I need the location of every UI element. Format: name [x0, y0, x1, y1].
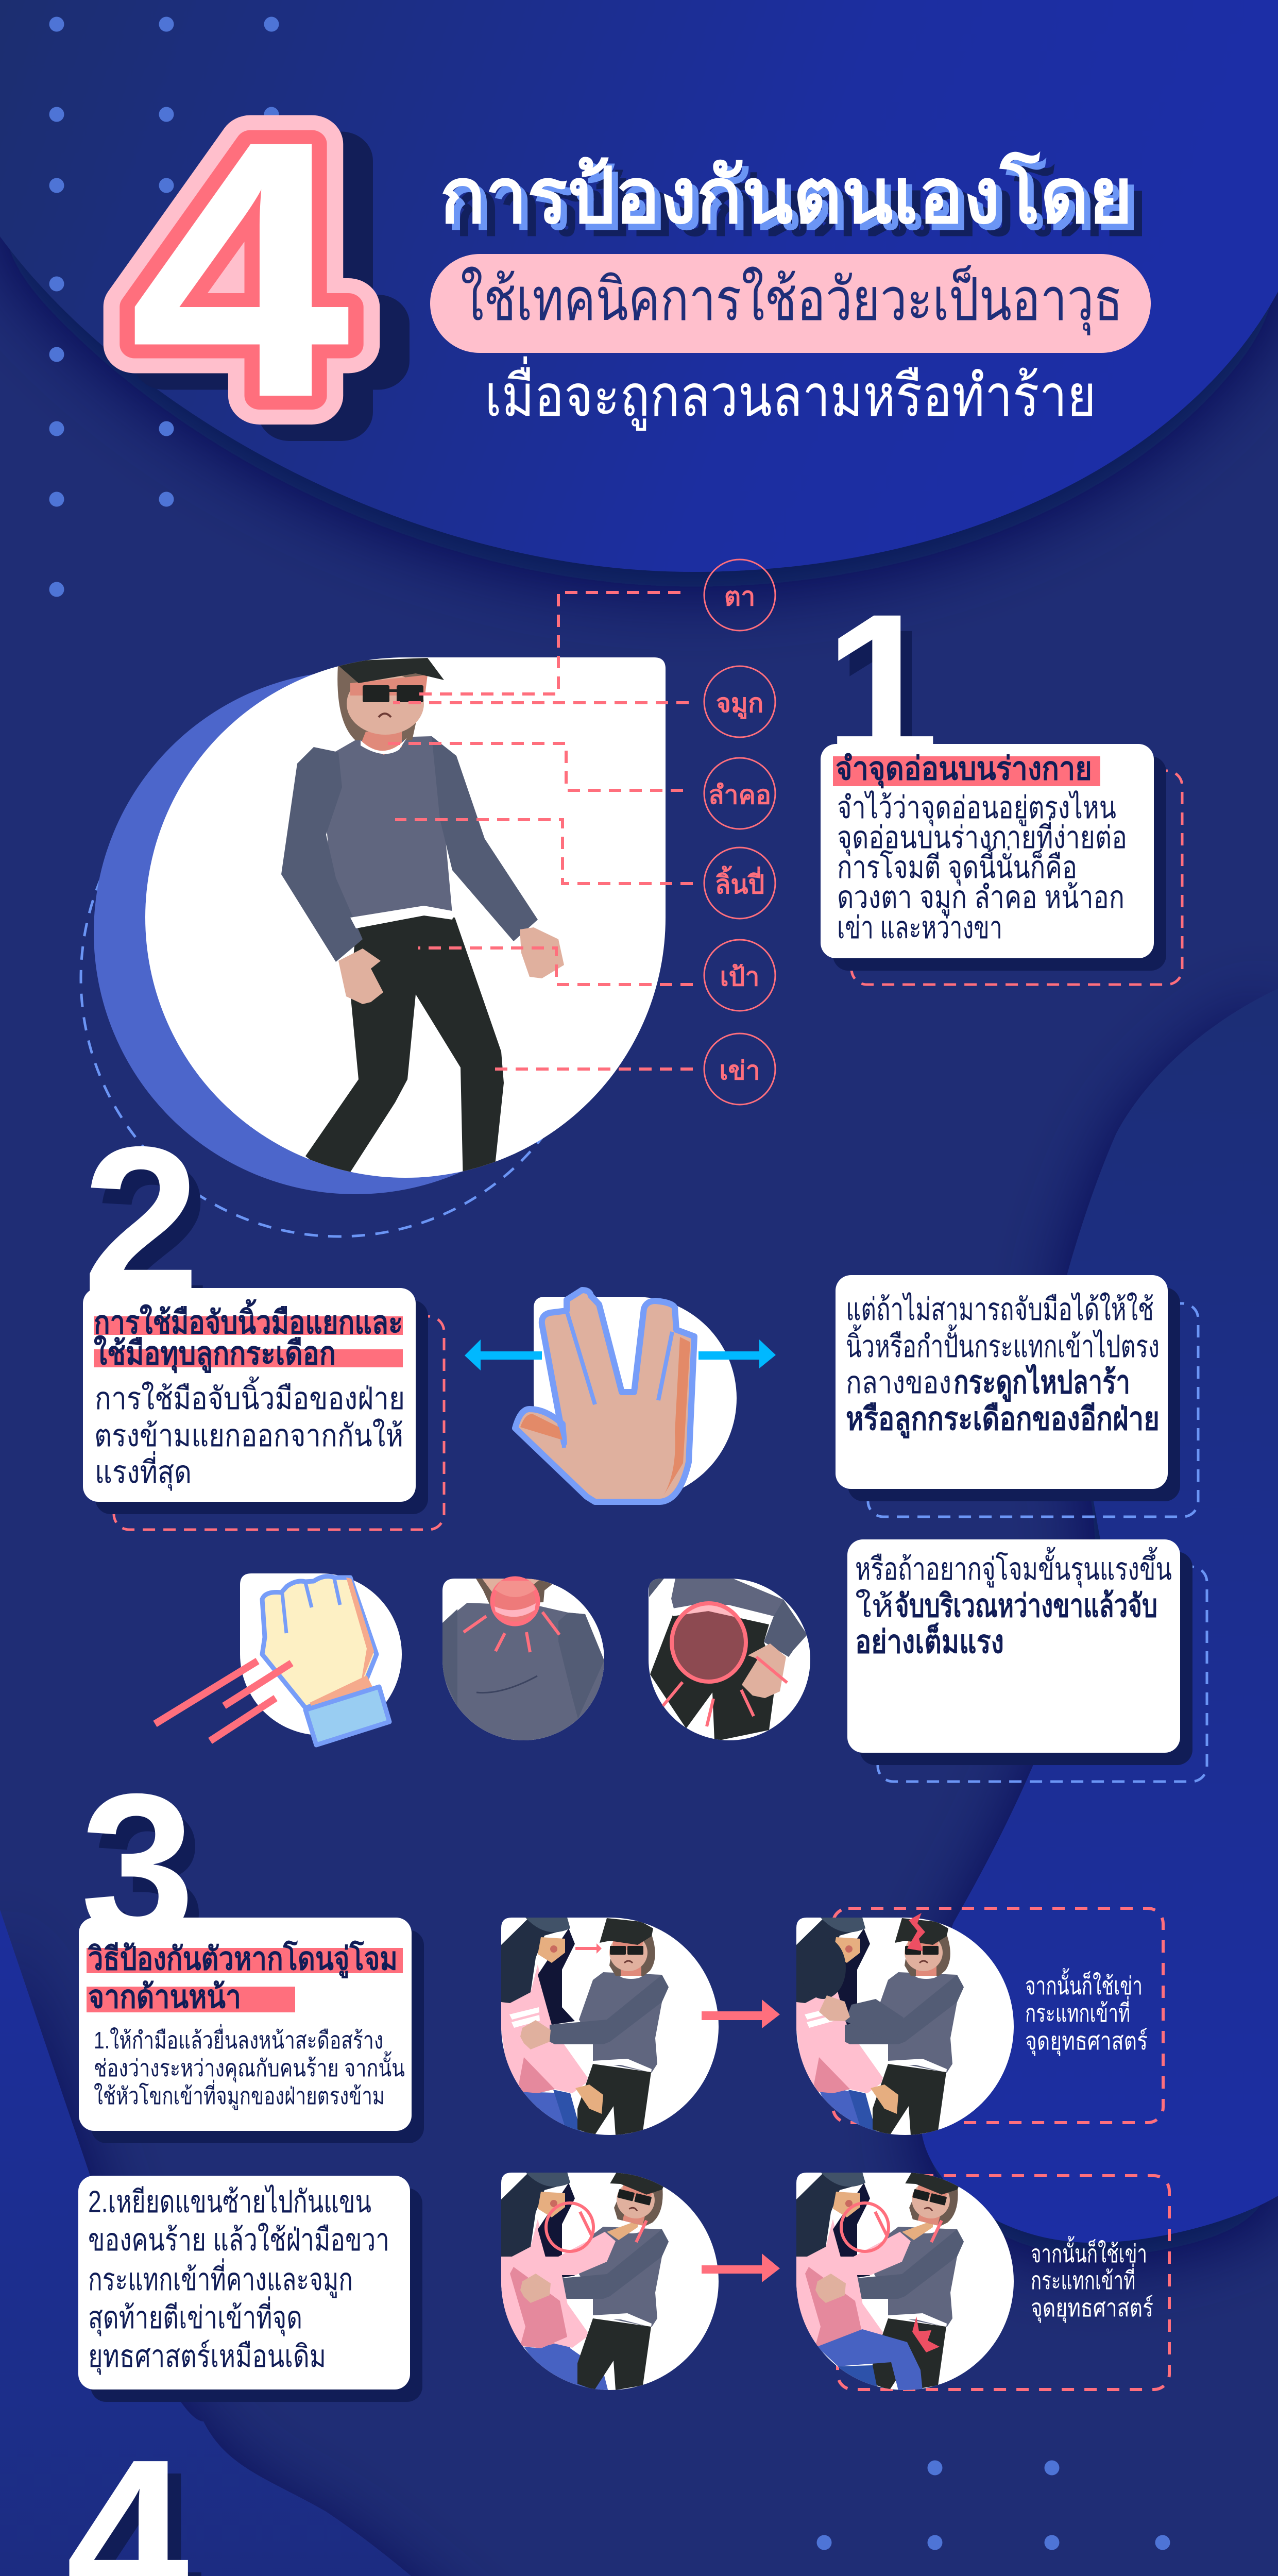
panel: step 3 A: 1.ให้กำมือแล้วยื่นลงหน้าสะดือสร้าง — [94, 2024, 383, 2054]
panel: step 3 A: วิธีป้องกันตัวหากโดนจู่โจม — [88, 1940, 398, 1978]
panel: step 3 A: ใช้หัวโขกเข้าที่จมูกของฝ่ายตรงข้าม — [94, 2079, 385, 2110]
body part labels: จมูก — [716, 689, 763, 719]
numeral 2: 2 — [94, 1118, 211, 1354]
numeral 3: 3 — [92, 1766, 206, 1996]
arrow: B1 to B2 — [702, 2253, 780, 2282]
panel: step 2 right top: กลางของ — [846, 1365, 951, 1400]
body part labels: ลิ้นปี่ — [715, 866, 764, 899]
caption: B2 — [1031, 2236, 1153, 2323]
title line 1: การป้องกันตนเองโดย — [454, 163, 1147, 251]
panel: step 1: การโจมตี จุดนี้นั่นก็คือ — [837, 845, 1077, 886]
scene: B2 — [796, 2159, 1014, 2391]
frame: A2 — [833, 1908, 1163, 2123]
section 1 figure — [81, 657, 666, 1236]
numeral 1: 1 — [836, 586, 950, 817]
panel: step 1: จำจุดอ่อนบนร่างกาย — [836, 751, 1092, 788]
dot pattern bottom right — [712, 2461, 1274, 2576]
panel: step 3 A: ช่องว่างระหว่างคุณกับคนร้าย จากนั้น — [94, 2051, 405, 2083]
arrow: A1 to A2 — [702, 1999, 780, 2028]
title line 3: เมื่อจะถูกลวนลามหรือทำร้าย — [485, 356, 1096, 431]
caption: B2: กระแทกเข้าที่ — [1031, 2263, 1135, 2295]
panel: step 2 right bottom: ให้ — [855, 1589, 894, 1623]
right background blob — [921, 989, 1278, 2243]
panel: step 1 — [821, 744, 1182, 985]
panel: step 1: จำไว้ว่าจุดอ่อนอยู่ตรงไหน — [837, 790, 1116, 826]
left background blob — [0, 1910, 642, 2576]
body part labels: เข่า — [719, 1056, 760, 1085]
numeral 1: 1 — [824, 571, 939, 801]
panel: step 3 B — [78, 2176, 422, 2402]
icon: punching fist — [155, 1573, 402, 1745]
panel: step 2 right top — [836, 1275, 1198, 1517]
panel: step 2 right top: นิ้วหรือกำปั้นกระแทกเข้าไปตรง — [846, 1324, 1160, 1364]
header dome — [0, 0, 1278, 572]
panel: step 3 B: สุดท้ายตีเข่าเข้าที่จุด — [88, 2296, 302, 2336]
scene: A1 — [501, 1918, 719, 2138]
panel: step 3 B: กระแทกเข้าที่คางและจมูก — [88, 2258, 353, 2298]
panel: step 2 right top: กระดูกไหปลาร้า — [953, 1364, 1130, 1402]
panel: step 2 right bottom: อย่างเต็มแรง — [855, 1622, 1004, 1660]
icon: spread fingers hand — [515, 1290, 737, 1502]
panel: step 2 left — [83, 1288, 444, 1530]
body part labels: ตา — [724, 582, 755, 611]
callout leader lines — [387, 592, 693, 1069]
illustration: throat strike — [442, 1579, 604, 1752]
panel: step 3 A — [79, 1918, 424, 2143]
panel: step 1: เข่า และหว่างขา — [837, 910, 1002, 945]
scene: B1 — [501, 2159, 719, 2396]
panel: step 2 left: ตรงข้ามแยกออกจากกันให้ — [94, 1418, 403, 1453]
panel: step 2 left: การใช้มือจับนิ้วมือของฝ่าย — [95, 1376, 405, 1416]
body part labels — [704, 560, 775, 1105]
panel: step 2 left: แรงที่สุด — [95, 1451, 192, 1491]
numeral 3: 3 — [80, 1751, 195, 1981]
title pill — [430, 254, 1151, 353]
caption: A2: กระแทกเข้าที่ — [1025, 1996, 1130, 2027]
big number 4 sticker: 4 — [129, 65, 353, 473]
caption: B2: จุดยุทธศาสตร์ — [1031, 2295, 1153, 2323]
panel: step 2 right top: แต่ถ้าไม่สามารถจับมือได้ให้ใช้ — [846, 1292, 1154, 1327]
big number 4 sticker: 4 — [159, 81, 383, 490]
big number 4 sticker: 4 — [129, 65, 353, 473]
arrow: right blue — [698, 1340, 776, 1368]
panel: step 3 B: 2.เหยียดแขนซ้ายไปกันแขน — [88, 2184, 371, 2219]
title line 1: การป้องกันตนเองโดย — [440, 151, 1133, 239]
title pill: ใช้เทคนิคการใช้อวัยวะเป็นอาวุธ — [461, 265, 1123, 335]
illustration: groin strike — [649, 1579, 810, 1741]
panel: step 1: จุดอ่อนบนร่างกายที่ง่ายต่อ — [837, 816, 1127, 856]
panel: step 2 right top: หรือลูกกระเดือกของอีกฝ่าย — [846, 1401, 1160, 1438]
panel: step 3 B: ยุทธศาสตร์เหมือนเดิม — [88, 2339, 326, 2375]
panel: step 2 left: ใช้มือทุบลูกกระเดือก — [94, 1335, 336, 1373]
caption: B2: จากนั้นก็ใช้เข่า — [1031, 2236, 1147, 2268]
scene: A2 — [796, 1913, 1014, 2138]
dot pattern top left — [49, 16, 279, 597]
caption: A2: จุดยุทธศาสตร์ — [1025, 2028, 1148, 2056]
caption: A2 — [1025, 1968, 1148, 2056]
frame: B2 — [838, 2176, 1169, 2389]
panel: step 1: ดวงตา จมูก ลำคอ หน้าอก — [837, 880, 1124, 916]
panel: step 2 right bottom — [847, 1539, 1207, 1782]
arrow: left blue — [465, 1340, 542, 1370]
caption: A2: จากนั้นก็ใช้เข่า — [1025, 1968, 1143, 2000]
panel: step 2 left: การใช้มือจับนิ้วมือแยกและ — [94, 1299, 403, 1341]
numeral 2: 2 — [82, 1103, 200, 1338]
big number 4 sticker: 4 — [129, 65, 353, 473]
panel: step 3 A: จากด้านหน้า — [88, 1979, 241, 2015]
title line 1: การป้องกันตนเองโดย — [446, 157, 1139, 245]
panel: step 2 right bottom: จับบริเวณหว่างขาแล้วจับ — [895, 1588, 1157, 1624]
panel: step 3 B: ของคนร้าย แล้วใช้ฝ่ามือขวา — [88, 2223, 389, 2257]
body part labels: เป้า — [720, 962, 759, 991]
panel: step 2 right bottom: หรือถ้าอยากจู่โจมขั้นรุนแรงขึ้น — [855, 1547, 1172, 1588]
body part labels: ลำคอ — [708, 781, 771, 809]
